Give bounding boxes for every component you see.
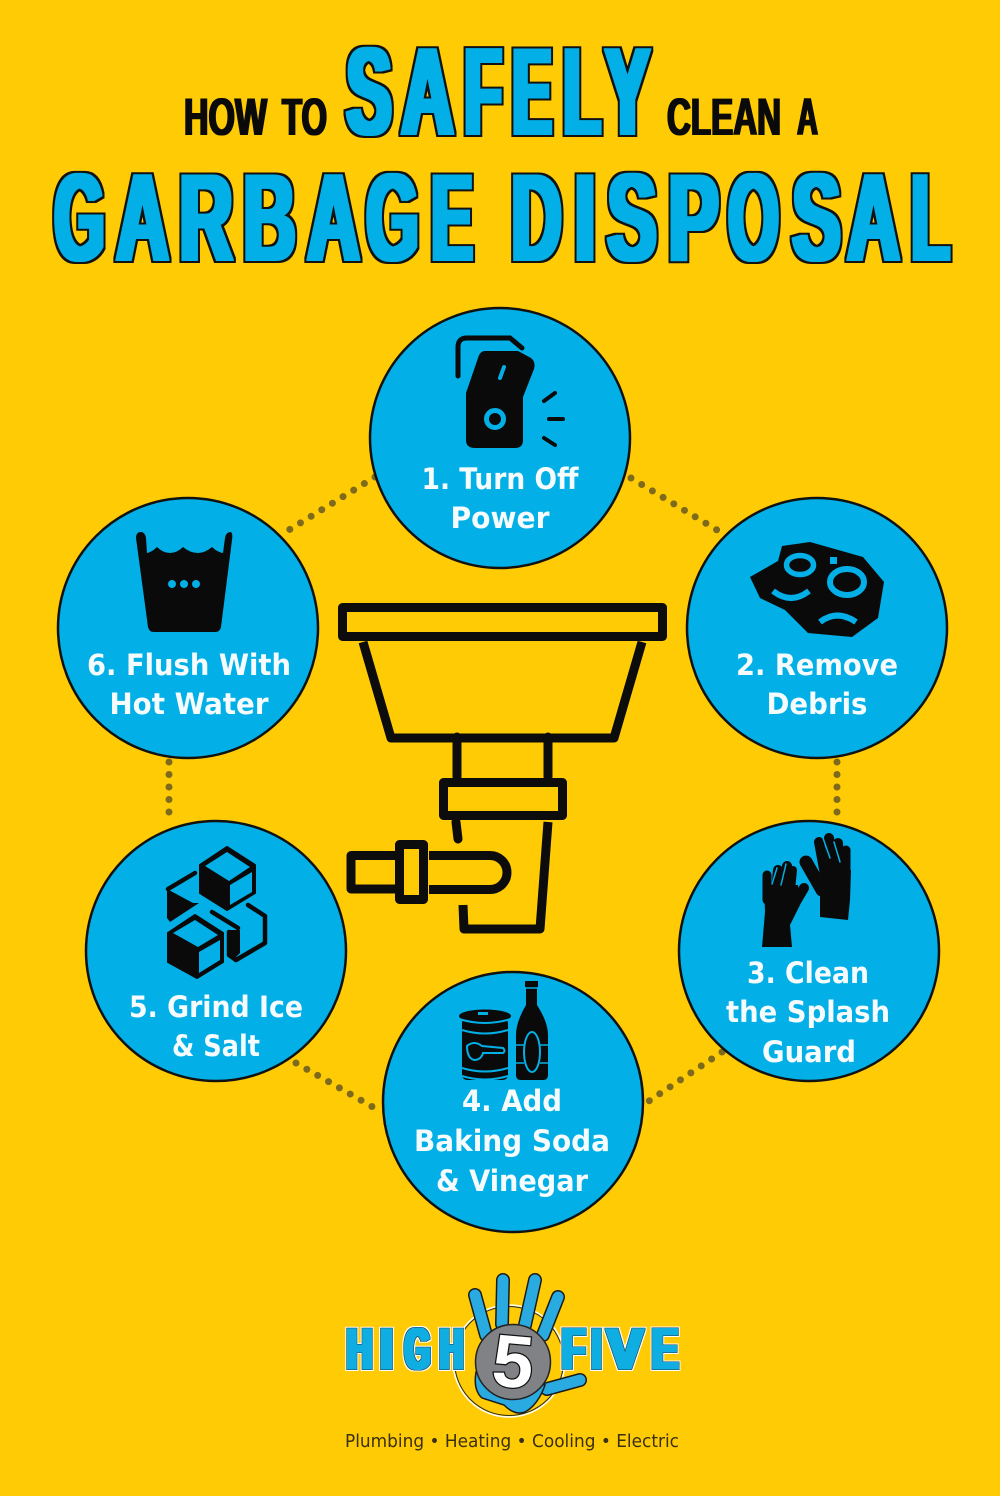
title: A bbox=[402, 24, 454, 162]
label: step 3: Guard bbox=[762, 1035, 856, 1069]
logo: High Five bbox=[345, 1280, 679, 1452]
logo wordmark: I bbox=[380, 1317, 393, 1382]
title: G bbox=[54, 150, 104, 288]
label: step 4: Baking Soda bbox=[414, 1124, 610, 1158]
label: step 4: & Vinegar bbox=[436, 1164, 589, 1198]
logo grey disc with 5 bbox=[476, 1318, 550, 1405]
logo wordmark: F bbox=[562, 1317, 585, 1382]
title: CLEAN bbox=[667, 88, 781, 147]
label: step 4: 4. Add bbox=[462, 1084, 562, 1118]
label: step 6 bbox=[87, 648, 291, 721]
dotted connectors between steps bbox=[169, 477, 837, 1110]
title: G bbox=[366, 150, 418, 288]
title: Y bbox=[606, 24, 650, 162]
label: step 4 bbox=[414, 1084, 610, 1198]
title: D bbox=[512, 150, 562, 288]
title: A bbox=[797, 88, 818, 147]
title: L bbox=[564, 24, 600, 162]
label: step 5: 5. Grind Ice bbox=[129, 990, 303, 1024]
title: E bbox=[512, 24, 552, 162]
icon: can and bottle bbox=[459, 981, 548, 1080]
label: step 5 bbox=[129, 990, 303, 1063]
label: step 3 bbox=[726, 956, 890, 1069]
logo emblem circle bbox=[453, 1305, 565, 1417]
label: step 2 bbox=[736, 648, 898, 721]
label: step 1: 1. Turn Off bbox=[422, 462, 579, 496]
icon: ice cubes bbox=[167, 847, 265, 978]
step 2: remove debris bbox=[687, 498, 947, 758]
title: I bbox=[574, 150, 596, 288]
title: S bbox=[346, 24, 392, 162]
logo wordmark: H bbox=[440, 1317, 463, 1382]
label: step 5: & Salt bbox=[172, 1029, 260, 1063]
title: TO bbox=[282, 88, 327, 147]
label: step 1 bbox=[422, 462, 579, 535]
title: S bbox=[608, 150, 656, 288]
icon: gloves bbox=[762, 838, 851, 947]
title: HOW bbox=[184, 88, 267, 147]
logo wordmark bbox=[347, 1317, 678, 1382]
logo tagline: Plumbing • Heating • Cooling • Electric bbox=[345, 1431, 679, 1452]
label: step 3: 3. Clean bbox=[747, 956, 869, 990]
logo wordmark: E bbox=[652, 1317, 678, 1382]
icon: debris bbox=[750, 542, 884, 637]
logo wordmark: G bbox=[405, 1317, 430, 1382]
icon: bucket of water bbox=[136, 532, 232, 632]
title: A bbox=[848, 150, 900, 288]
title: E bbox=[432, 150, 472, 288]
label: step 2: 2. Remove bbox=[736, 648, 898, 682]
label: step 3: the Splash bbox=[726, 995, 890, 1029]
title: F bbox=[464, 24, 502, 162]
title: L bbox=[912, 150, 950, 288]
step 3: clean the splash guard bbox=[679, 821, 939, 1081]
title bbox=[54, 24, 950, 288]
logo grey disc with 5: 5 bbox=[489, 1318, 537, 1405]
title: P bbox=[668, 150, 718, 288]
step 4: add baking soda and vinegar bbox=[383, 972, 643, 1232]
title: A bbox=[116, 150, 168, 288]
logo wordmark: H bbox=[347, 1317, 372, 1382]
title: R bbox=[180, 150, 232, 288]
label: step 1: Power bbox=[450, 501, 550, 535]
icon: power switch bbox=[458, 338, 563, 448]
logo hand bbox=[475, 1280, 580, 1413]
title: A bbox=[308, 150, 360, 288]
step 6: flush with hot water bbox=[58, 498, 318, 758]
label: step 6: Hot Water bbox=[110, 687, 269, 721]
step 1: turn off power bbox=[370, 308, 630, 568]
title: O bbox=[728, 150, 778, 288]
logo wordmark: I bbox=[592, 1317, 601, 1382]
logo wordmark: V bbox=[607, 1317, 643, 1382]
title: B bbox=[244, 150, 296, 288]
step 5: grind ice and salt bbox=[86, 821, 346, 1081]
label: step 6: 6. Flush With bbox=[87, 648, 291, 682]
title: S bbox=[792, 150, 840, 288]
garbage disposal illustration bbox=[342, 608, 662, 929]
label: step 2: Debris bbox=[766, 687, 868, 721]
